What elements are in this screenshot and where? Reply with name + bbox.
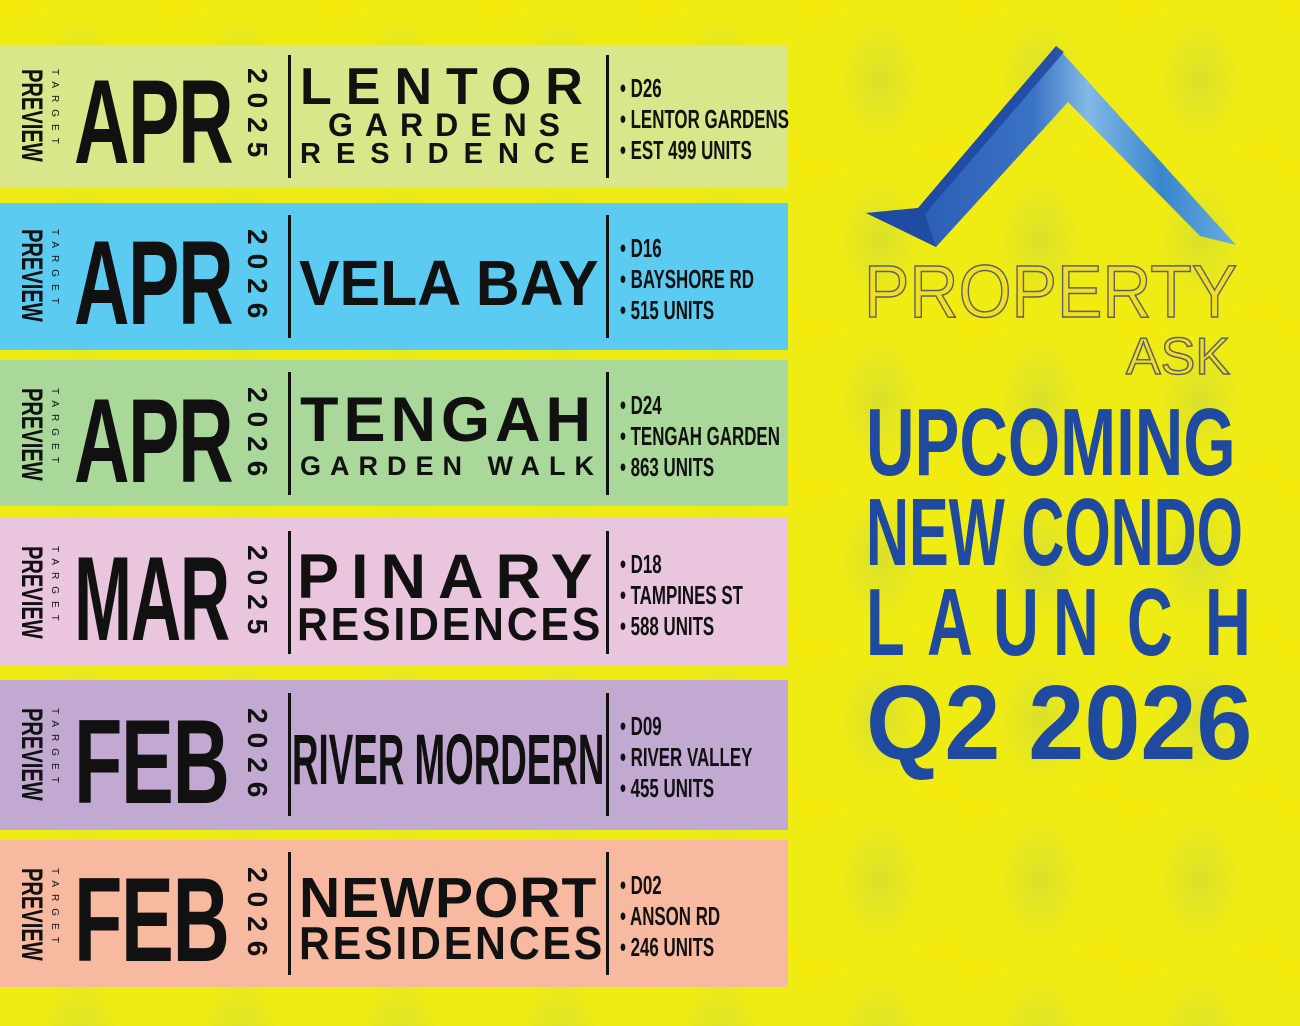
details: • 455 UNITS (620, 773, 714, 803)
logo: PROPERTY ASK text: PROPERTY (864, 250, 1237, 333)
project name (299, 866, 605, 969)
details: • 863 UNITS (620, 452, 714, 482)
year: 2026 (242, 708, 273, 806)
project name: RESIDENCES (297, 598, 603, 650)
target preview label: PREVIEW (15, 708, 48, 801)
target preview label: PREVIEW (15, 69, 48, 162)
month: MAR (74, 532, 229, 666)
logo: roof icon (866, 46, 1236, 247)
title: upcoming new condo launch Q2 2026: A (927, 569, 973, 676)
month: APR (74, 55, 232, 189)
details: • BAYSHORE RD (620, 264, 754, 294)
details: • D24 (620, 390, 662, 420)
row 2: Vela Bay (0, 203, 788, 350)
details: • D26 (620, 73, 662, 103)
row 6: Newport Residences (0, 840, 788, 987)
logo: PROPERTY ASK text: ASK (1126, 328, 1230, 386)
row 5: River Mordern (0, 680, 788, 830)
details: • 588 UNITS (620, 611, 714, 641)
target preview label: TARGET (49, 868, 60, 950)
title: upcoming new condo launch Q2 2026: Q2 2026 (866, 664, 1252, 782)
project name (297, 542, 605, 650)
details (620, 549, 743, 641)
target preview label: TARGET (49, 388, 60, 470)
details: • 246 UNITS (620, 932, 714, 962)
row 4: Pinary Residences (0, 518, 788, 666)
details (620, 870, 720, 962)
details: • RIVER VALLEY (620, 742, 752, 772)
target preview label: TARGET (49, 69, 60, 151)
project name: LENTOR (300, 58, 597, 116)
logo: PROPERTY ASK text (864, 250, 1237, 386)
title: upcoming new condo launch Q2 2026: U (993, 569, 1039, 676)
title: upcoming new condo launch Q2 2026: UPCOMING (866, 389, 1236, 496)
year: 2026 (242, 867, 273, 965)
target preview label: PREVIEW (15, 546, 48, 639)
details: • D16 (620, 233, 662, 263)
details: • 515 UNITS (620, 295, 714, 325)
year: 2025 (242, 545, 273, 643)
target preview label: PREVIEW (15, 868, 48, 961)
row 3: Tengah Garden Walk (0, 360, 788, 506)
target preview label: TARGET (49, 229, 60, 311)
month: APR (74, 216, 232, 350)
project name: GARDENS (328, 107, 572, 143)
details: • ANSON RD (620, 901, 720, 931)
project name: RESIDENCE (300, 138, 604, 170)
title: upcoming new condo launch Q2 2026: N (1053, 569, 1099, 676)
year: 2025 (242, 68, 273, 166)
project name: GARDEN WALK (300, 451, 603, 481)
target preview label: TARGET (49, 546, 60, 628)
project name: NEWPORT (299, 866, 597, 930)
details: • D02 (620, 870, 662, 900)
title: upcoming new condo launch Q2 2026: NEW CONDO (866, 479, 1243, 586)
details: • LENTOR GARDENS (620, 104, 789, 134)
details: • TAMPINES ST (620, 580, 743, 610)
month: FEB (74, 853, 228, 987)
project name: PINARY (297, 542, 605, 612)
month: FEB (74, 695, 228, 829)
title: upcoming new condo launch Q2 2026: L (866, 569, 905, 676)
target preview label: TARGET (49, 708, 60, 790)
project name: RESIDENCES (299, 917, 605, 969)
details (620, 233, 754, 325)
details: • D18 (620, 549, 662, 579)
target preview label: PREVIEW (15, 229, 48, 322)
details (620, 711, 752, 803)
year: 2026 (242, 387, 273, 485)
row 1: Lentor Gardens Residence (0, 45, 788, 188)
title: upcoming new condo launch Q2 2026: C (1127, 569, 1173, 676)
details: • D09 (620, 711, 662, 741)
details: • EST 499 UNITS (620, 135, 752, 165)
year: 2026 (242, 229, 273, 327)
details (620, 390, 780, 482)
title: upcoming new condo launch Q2 2026: H (1205, 569, 1251, 676)
details: • TENGAH GARDEN (620, 421, 780, 451)
project name: VELA BAY (299, 247, 599, 319)
project name: RIVER MORDERN (292, 720, 604, 799)
target preview label: PREVIEW (15, 388, 48, 481)
details (620, 73, 789, 165)
project name: TENGAH (300, 385, 596, 455)
project name (300, 58, 604, 170)
month: APR (74, 374, 232, 508)
title: upcoming new condo launch Q2 2026 (866, 389, 1252, 782)
